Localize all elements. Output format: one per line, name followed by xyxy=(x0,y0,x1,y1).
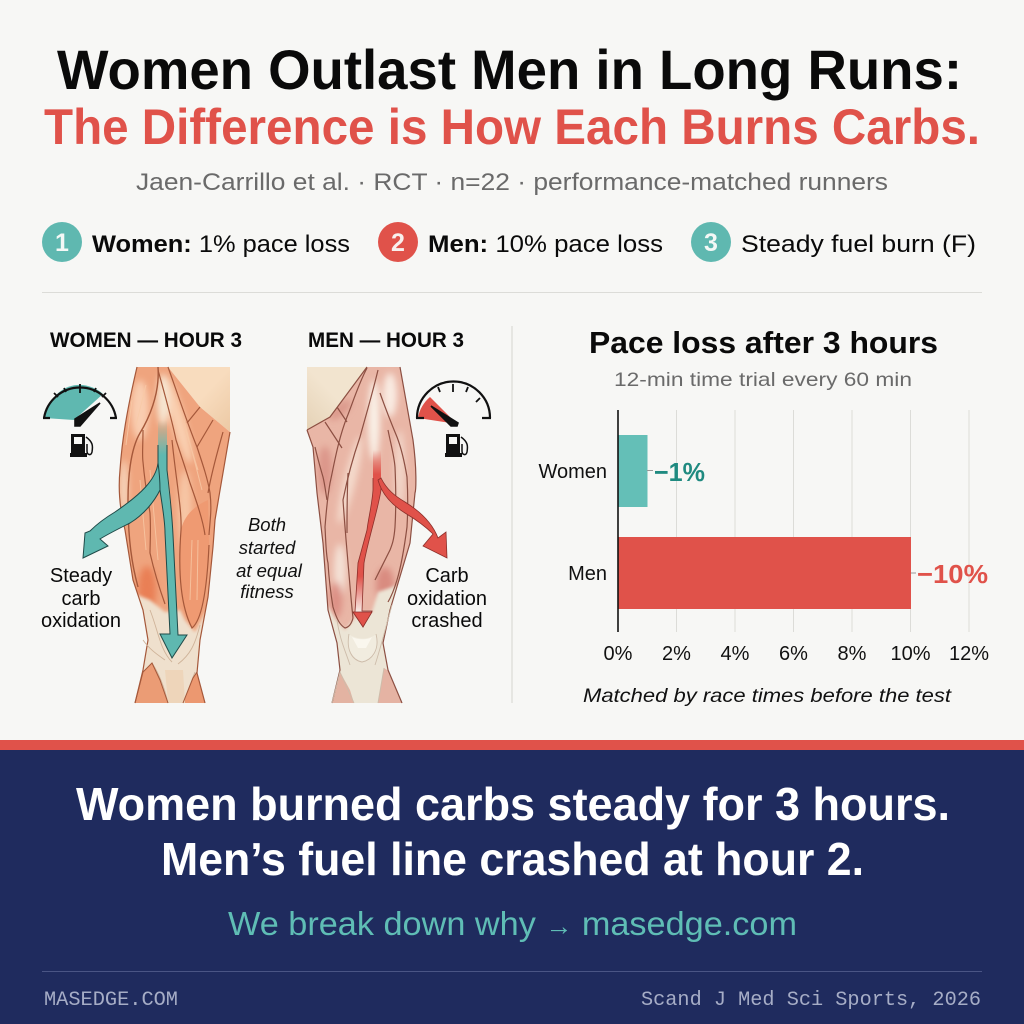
panel: pace loss chart xyxy=(538,325,989,707)
title xyxy=(44,38,980,155)
note: both started at equal fitness: Both xyxy=(248,514,286,535)
axis line xyxy=(617,410,619,632)
chart heading: Pace loss after 3 hours xyxy=(589,325,938,360)
legend item: women: 1 xyxy=(55,229,69,257)
bar: men xyxy=(618,537,911,609)
note: both started at equal fitness xyxy=(236,514,303,602)
value label: men: −10% xyxy=(917,559,988,589)
arrow: women main flow xyxy=(158,420,187,658)
x axis labels: 12% xyxy=(949,643,989,665)
chart footnote: Matched by race times before the test xyxy=(583,685,953,707)
takeaway headline xyxy=(76,778,950,885)
x axis labels: 6% xyxy=(779,643,808,665)
icon: women fuel gauge xyxy=(43,384,117,457)
illustration: men thigh muscles xyxy=(307,367,416,710)
heading: women: WOMEN — HOUR 3 xyxy=(50,328,242,352)
x axis labels xyxy=(604,643,989,665)
label: carb oxidation crashed: Carb xyxy=(425,565,469,587)
subtitle: Jaen-Carrillo et al. · RCT · n=22 · performance-matched runners xyxy=(136,169,888,196)
panel: men leg xyxy=(307,328,491,710)
title: Women Outlast Men in Long Runs: xyxy=(57,38,962,101)
arrow: men main flow xyxy=(353,450,381,627)
label: steady carb oxidation xyxy=(41,565,121,632)
footer citation: Scand J Med Sci Sports, 2026 xyxy=(641,989,981,1012)
label: carb oxidation crashed xyxy=(407,565,487,632)
bar: women xyxy=(618,435,648,507)
icon: men fuel gauge xyxy=(416,382,491,457)
category labels: Men xyxy=(568,563,607,585)
takeaway headline: Women burned carbs steady for 3 hours. xyxy=(76,778,950,830)
legend item: men: Men: 10% pace loss xyxy=(428,231,663,258)
label: carb oxidation crashed: oxidation xyxy=(407,588,487,610)
legend item: fuel burn: 3 xyxy=(704,229,718,257)
title: The Difference is How Each Burns Carbs. xyxy=(44,99,980,155)
label: steady carb oxidation: Steady xyxy=(50,565,112,587)
call to action: We break down why → masedge.com xyxy=(228,905,797,942)
legend item: men xyxy=(378,222,663,262)
x axis labels: 0% xyxy=(604,643,633,665)
x axis labels: 8% xyxy=(838,643,867,665)
note: both started at equal fitness: started xyxy=(239,537,296,558)
panel: women leg xyxy=(41,328,242,710)
arrow: women branch flow xyxy=(83,463,160,558)
legend item: women xyxy=(42,222,350,262)
note: both started at equal fitness: at equal xyxy=(236,560,303,581)
x axis labels: 2% xyxy=(662,643,691,665)
x axis labels: 10% xyxy=(890,643,931,665)
legend item: fuel burn xyxy=(691,222,976,262)
legend row xyxy=(42,222,976,262)
note: both started at equal fitness: fitness xyxy=(240,581,294,602)
band: footer panel xyxy=(0,740,1024,1024)
footer brand: MASEDGE.COM xyxy=(44,989,178,1012)
value label: women: −1% xyxy=(654,457,705,487)
arrow: men branch flow xyxy=(378,478,447,558)
category labels: Women xyxy=(538,461,607,483)
label: carb oxidation crashed: crashed xyxy=(411,610,483,632)
legend item: men: 2 xyxy=(391,229,405,257)
takeaway headline: Men’s fuel line crashed at hour 2. xyxy=(161,833,864,885)
legend item: fuel burn: Steady fuel burn (F) xyxy=(741,231,976,258)
category labels xyxy=(538,461,607,585)
label: steady carb oxidation: carb xyxy=(62,588,100,610)
legend item: women: Women: 1% pace loss xyxy=(92,231,350,258)
chart subtitle: 12-min time trial every 60 min xyxy=(614,369,912,391)
x axis labels: 4% xyxy=(721,643,750,665)
label: steady carb oxidation: oxidation xyxy=(41,610,121,632)
illustration: women thigh muscles xyxy=(119,367,237,710)
heading: men: MEN — HOUR 3 xyxy=(308,328,464,352)
